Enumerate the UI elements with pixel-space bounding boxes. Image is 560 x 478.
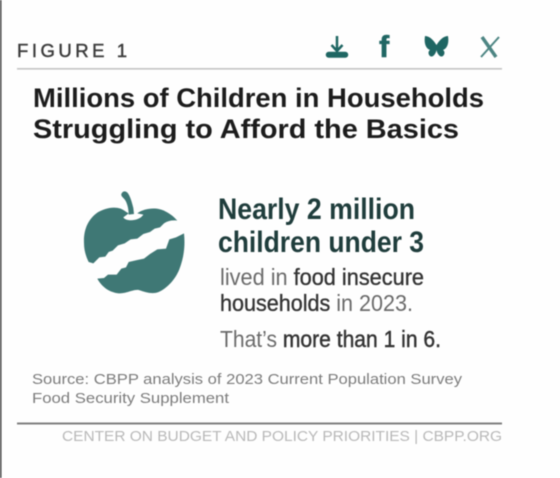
header rule <box>17 68 502 70</box>
footer rule <box>17 422 502 424</box>
stat description <box>220 264 441 352</box>
apple lower half <box>97 233 184 293</box>
icon: bluesky butterfly <box>425 36 448 57</box>
apple stem <box>121 191 134 215</box>
apple upper half <box>84 208 177 263</box>
stat description: lived in food insecure <box>220 264 424 290</box>
icon: broken apple <box>84 191 184 293</box>
icon: download <box>326 36 348 57</box>
headline stat: Nearly 2 million <box>218 193 415 226</box>
headline stat <box>218 193 424 259</box>
icon: X <box>481 37 499 57</box>
title <box>33 83 484 144</box>
title: Millions of Children in Households <box>33 83 484 113</box>
stat description: That’s more than 1 in 6. <box>220 326 441 352</box>
source note: Source: CBPP analysis of 2023 Current Population Survey <box>32 371 463 388</box>
source note: Food Security Supplement <box>32 390 230 407</box>
title: Struggling to Afford the Basics <box>33 114 459 144</box>
stat description: households in 2023. <box>220 290 413 316</box>
footer credit: CENTER ON BUDGET AND POLICY PRIORITIES | CBPP.ORG <box>62 428 502 445</box>
headline stat: children under 3 <box>218 226 424 259</box>
figure label: FIGURE 1 <box>17 40 127 61</box>
icon: facebook: f <box>379 29 390 64</box>
source note <box>32 371 463 407</box>
